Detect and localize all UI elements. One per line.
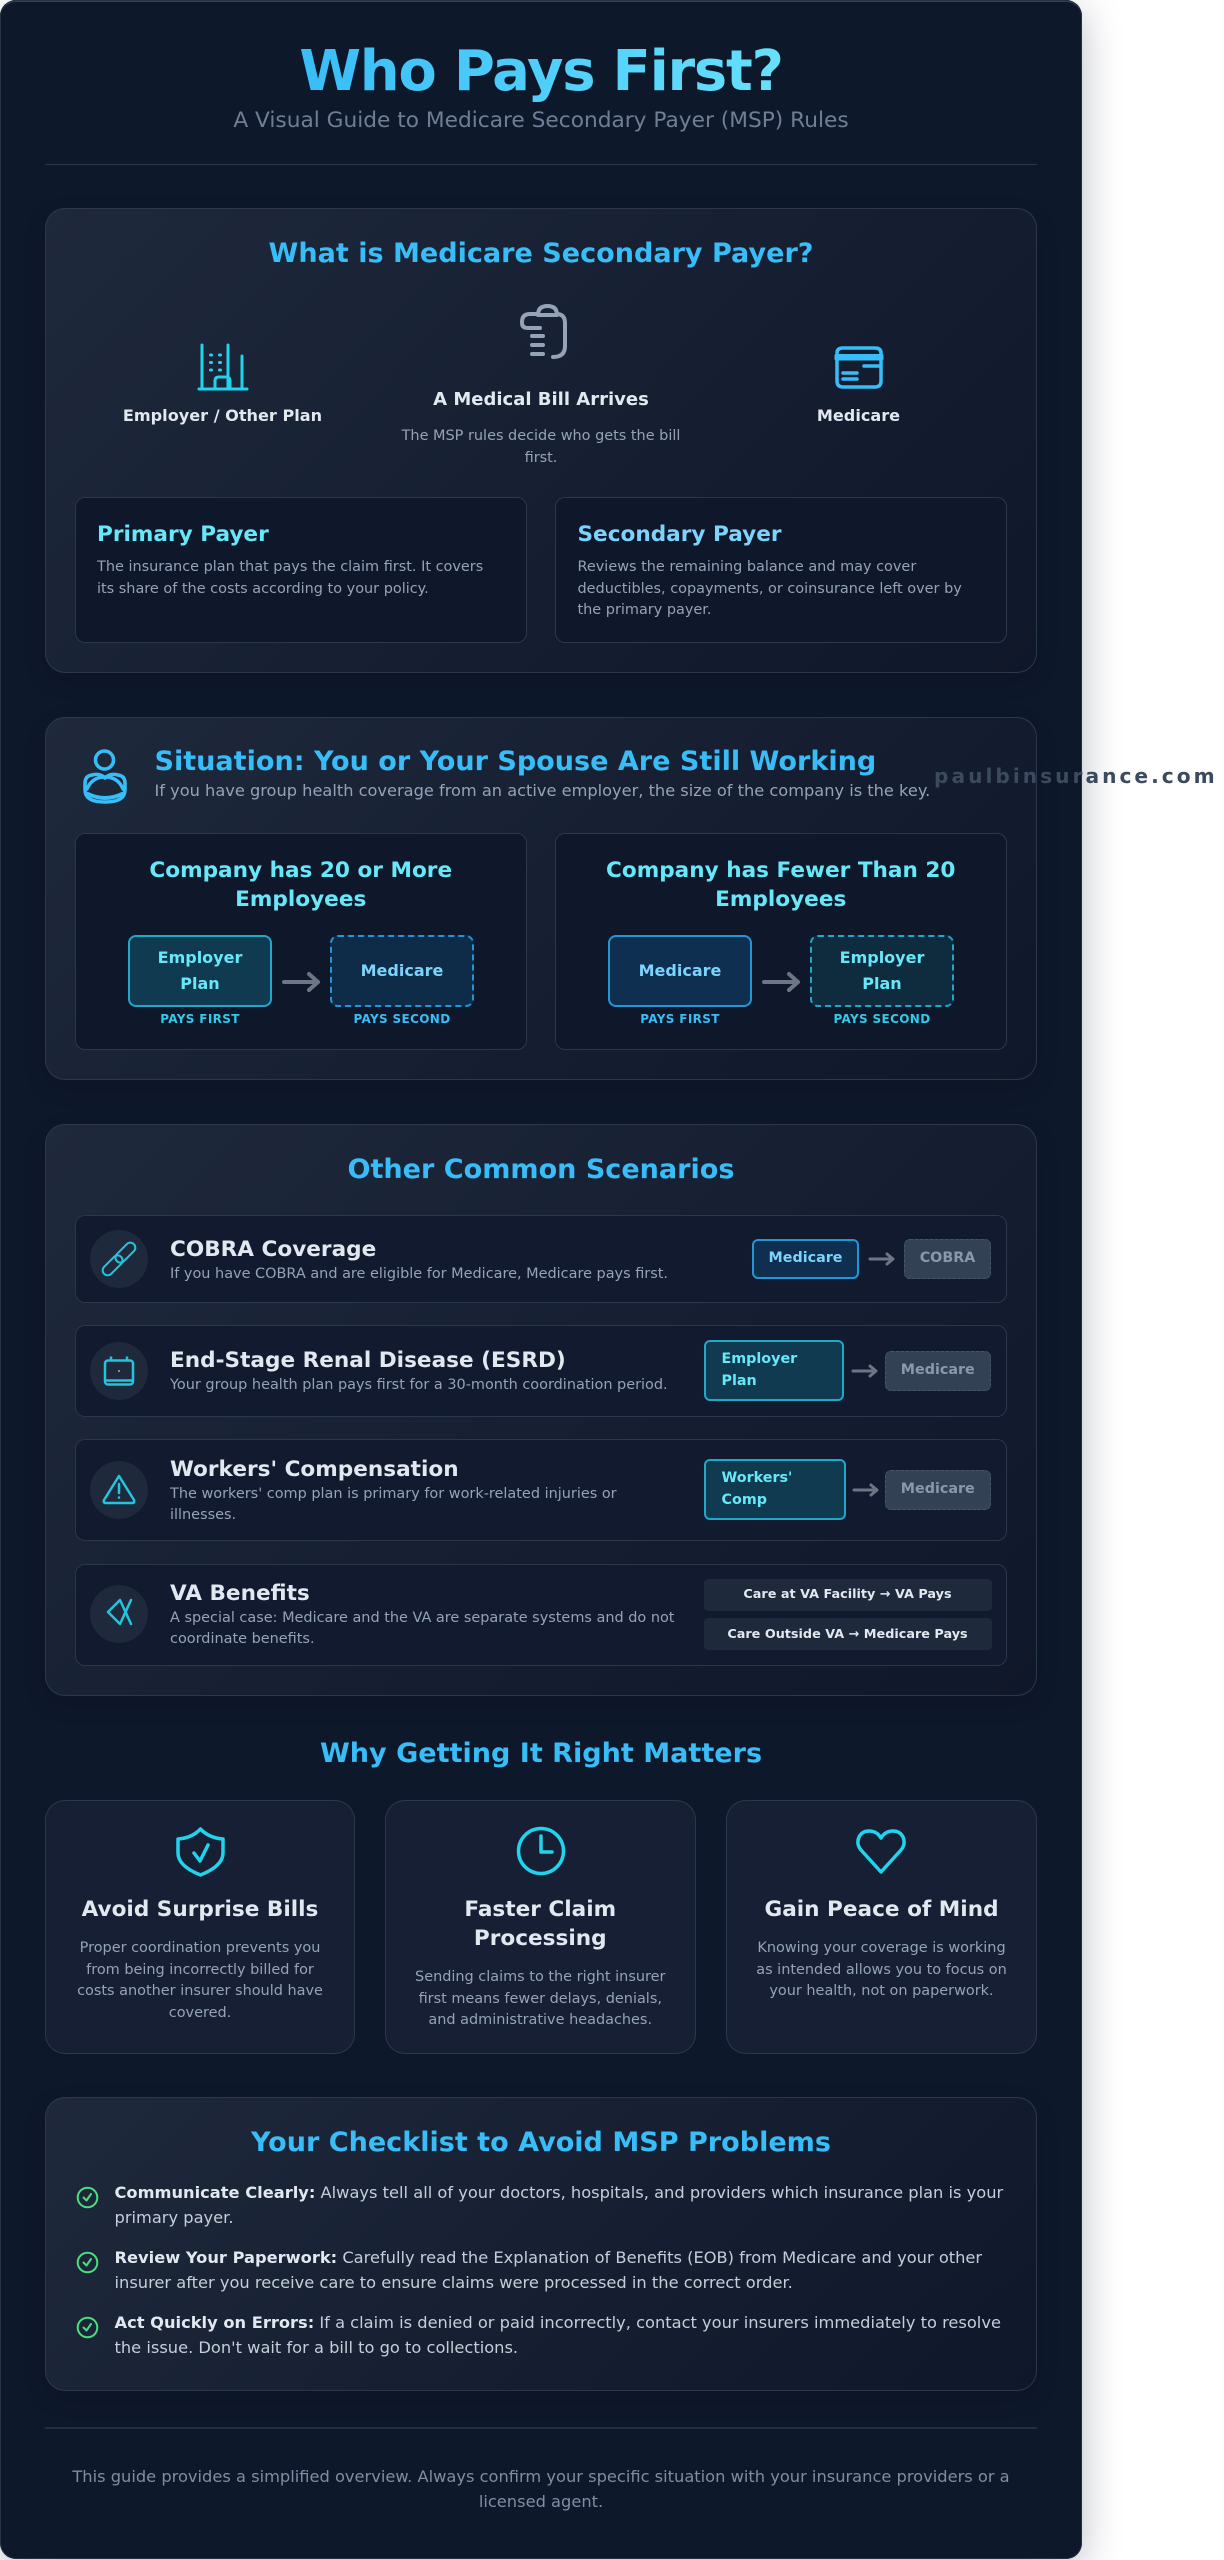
icon: person bbox=[83, 749, 127, 804]
title: Workers' Compensation bbox=[170, 1456, 459, 1482]
label: pays second: PAYS SECOND bbox=[833, 1012, 931, 1026]
arrow bbox=[852, 1364, 878, 1378]
icon: va symbol bbox=[90, 1585, 148, 1643]
footer note bbox=[72, 2466, 1010, 2510]
label: pays first: PAYS FIRST bbox=[640, 1012, 720, 1026]
description bbox=[170, 1486, 617, 1523]
text: Act Quickly on Errors: If a claim is denied or paid incorrectly, contact your insurers immediately to resolve bbox=[114, 2313, 1001, 2332]
card: secondary payer bbox=[555, 497, 1006, 643]
box: employer plan primary: Plan bbox=[180, 974, 220, 993]
badge: medicare bbox=[752, 1239, 859, 1279]
description: Knowing your coverage is working bbox=[757, 1940, 1006, 1956]
panel: what is medicare secondary payer bbox=[45, 208, 1037, 673]
row: va benefits bbox=[75, 1564, 1007, 1666]
card: fewer than 20 employees bbox=[555, 833, 1006, 1050]
heading: Your Checklist to Avoid MSP Problems bbox=[251, 2127, 831, 2158]
title: End-Stage Renal Disease (ESRD) bbox=[170, 1348, 566, 1373]
badge: medicare bbox=[884, 1470, 991, 1510]
title: Faster Claim bbox=[464, 1896, 616, 1922]
box: employer plan secondary bbox=[810, 935, 954, 1007]
description bbox=[77, 1940, 323, 2021]
secondary payer text: the primary payer. bbox=[578, 602, 712, 618]
description: costs another insurer should have bbox=[77, 1983, 323, 1999]
heading: What is Medicare Secondary Payer? bbox=[269, 238, 813, 269]
heading: Why Getting It Right Matters bbox=[320, 1738, 762, 1769]
badge: medicare: Medicare bbox=[901, 1481, 975, 1497]
label: medicare: Medicare bbox=[817, 406, 900, 425]
badge: care at va: Care at VA Facility → VA Pays bbox=[743, 1587, 952, 1602]
badge: care outside va: Care Outside VA → Medicare Pays bbox=[727, 1626, 968, 1642]
box: employer plan secondary: Plan bbox=[862, 974, 902, 993]
badge: employer plan bbox=[704, 1340, 844, 1401]
secondary payer heading: Secondary Payer bbox=[578, 522, 782, 547]
row: esrd bbox=[75, 1325, 1007, 1417]
text: Review Your Paperwork: Carefully read the Explanation of Benefits (EOB) from Medicare and your other bbox=[114, 2248, 982, 2267]
check item: act quickly bbox=[76, 2313, 1001, 2357]
icon: employer building bbox=[198, 344, 248, 390]
arrow bbox=[868, 1252, 894, 1266]
card heading: Employees bbox=[235, 887, 366, 912]
badge: care at va bbox=[704, 1578, 992, 1610]
secondary payer text bbox=[578, 559, 962, 618]
description bbox=[756, 1940, 1007, 1999]
footer note: licensed agent. bbox=[479, 2492, 603, 2510]
subheading: If you have group health coverage from an active employer, the size of the company is the key. bbox=[154, 781, 930, 800]
description: If you have COBRA and are eligible for Medicare, Medicare pays first. bbox=[170, 1266, 668, 1282]
description: and administrative headaches. bbox=[428, 2012, 652, 2028]
footer note: This guide provides a simplified overview. Always confirm your specific situation with your insurance providers or a bbox=[72, 2466, 1010, 2486]
section: why it matters bbox=[45, 1738, 1037, 2054]
badge: employer plan: Plan bbox=[722, 1372, 757, 1388]
description: as intended allows you to focus on bbox=[756, 1962, 1007, 1978]
heading: Other Common Scenarios bbox=[348, 1154, 734, 1184]
badge: cobra bbox=[904, 1239, 991, 1279]
title: Gain Peace of Mind bbox=[764, 1896, 999, 1922]
text: insurer after you receive care to ensure claims were processed in the correct order. bbox=[114, 2273, 793, 2292]
text: medical bill description: The MSP rules decide who gets the bill bbox=[402, 428, 680, 444]
title bbox=[464, 1896, 616, 1950]
icon: check bbox=[76, 2186, 98, 2208]
panel: still working situation bbox=[45, 717, 1037, 1080]
icon: check bbox=[76, 2252, 98, 2274]
subtitle: A Visual Guide to Medicare Secondary Payer (MSP) Rules bbox=[233, 108, 849, 133]
text bbox=[114, 2313, 1001, 2357]
title: VA Benefits bbox=[170, 1581, 310, 1606]
text: Communicate Clearly: Always tell all of your doctors, hospitals, and providers which insurance plan is your bbox=[114, 2183, 1003, 2202]
label: employer: Employer / Other Plan bbox=[123, 406, 322, 425]
description: your health, not on paperwork. bbox=[769, 1983, 994, 1999]
badge: care outside va bbox=[704, 1618, 992, 1650]
header divider bbox=[45, 164, 1037, 165]
row: cobra bbox=[75, 1215, 1007, 1303]
title: Processing bbox=[474, 1926, 607, 1950]
arrow bbox=[852, 1483, 878, 1497]
badge: medicare: Medicare bbox=[769, 1250, 842, 1266]
description: from being incorrectly billed for bbox=[86, 1962, 314, 1978]
box: medicare primary: Medicare bbox=[639, 961, 721, 980]
badge: employer plan: Employer bbox=[722, 1351, 797, 1367]
arrow bbox=[762, 972, 800, 992]
card heading bbox=[606, 858, 955, 912]
label: pays second: PAYS SECOND bbox=[353, 1012, 451, 1026]
description: Proper coordination prevents you bbox=[80, 1940, 320, 1956]
title: COBRA Coverage bbox=[170, 1236, 376, 1262]
icon: medical bill clipboard bbox=[520, 304, 567, 359]
icon: shield bbox=[176, 1827, 225, 1877]
card heading: Company has 20 or More bbox=[149, 858, 452, 883]
card heading: Employees bbox=[715, 887, 846, 912]
title: Who Pays First? bbox=[299, 39, 783, 104]
primary payer text: its share of the costs according to your policy. bbox=[97, 581, 429, 597]
row: workers comp bbox=[75, 1439, 1007, 1541]
description: Your group health plan pays first for a 30-month coordination period. bbox=[170, 1377, 668, 1393]
card heading bbox=[149, 858, 452, 912]
heading: Situation: You or Your Spouse Are Still Working bbox=[154, 746, 876, 777]
badge: cobra: COBRA bbox=[920, 1250, 975, 1266]
primary payer heading: Primary Payer bbox=[97, 522, 269, 547]
text: medical bill description bbox=[402, 428, 680, 466]
box: medicare secondary bbox=[330, 935, 474, 1007]
primary payer text: The insurance plan that pays the claim first. It covers bbox=[97, 559, 483, 575]
description: illnesses. bbox=[170, 1507, 236, 1523]
icon: calendar bbox=[90, 1342, 148, 1400]
label: medical bill: A Medical Bill Arrives bbox=[433, 389, 649, 410]
primary payer text bbox=[96, 559, 483, 597]
description: A special case: Medicare and the VA are separate systems and do not bbox=[170, 1610, 674, 1626]
box: medicare primary bbox=[608, 935, 752, 1007]
badge: workers comp bbox=[704, 1459, 846, 1520]
icon: check bbox=[76, 2316, 98, 2338]
check item: review bbox=[76, 2248, 982, 2292]
arrow bbox=[282, 972, 320, 992]
description bbox=[170, 1610, 674, 1647]
icon: clock bbox=[516, 1826, 566, 1876]
text: primary payer. bbox=[114, 2208, 234, 2227]
badge: workers comp: Workers' bbox=[722, 1470, 792, 1486]
card: avoid surprise bills bbox=[45, 1800, 355, 2054]
badge: medicare bbox=[884, 1351, 991, 1391]
watermark: paulbinsurance.com bbox=[934, 764, 1218, 788]
box: employer plan primary: Employer bbox=[158, 948, 242, 967]
secondary payer text: Reviews the remaining balance and may cover bbox=[578, 559, 916, 575]
text bbox=[114, 2183, 1004, 2227]
label: pays first: PAYS FIRST bbox=[160, 1012, 240, 1026]
panel: checklist bbox=[45, 2097, 1037, 2391]
icon: chain link bbox=[90, 1230, 148, 1288]
text: medical bill description: first. bbox=[525, 450, 557, 466]
card heading: Company has Fewer Than 20 bbox=[606, 858, 955, 883]
secondary payer text: deductibles, copayments, or coinsurance left over by bbox=[578, 581, 962, 597]
box: medicare secondary: Medicare bbox=[361, 961, 443, 980]
description bbox=[415, 1969, 666, 2028]
box: employer plan secondary: Employer bbox=[840, 948, 924, 967]
card: primary payer bbox=[75, 497, 526, 643]
description: coordinate benefits. bbox=[170, 1631, 315, 1647]
card: 20 or more employees bbox=[75, 833, 526, 1050]
title: Avoid Surprise Bills bbox=[82, 1896, 318, 1922]
card: peace of mind bbox=[726, 1800, 1037, 2054]
text: the issue. Don't wait for a bill to go to collections. bbox=[114, 2338, 518, 2357]
footer divider bbox=[45, 2427, 1037, 2429]
description: first means fewer delays, denials, bbox=[419, 1991, 662, 2007]
icon: heart bbox=[856, 1829, 906, 1874]
badge: workers comp: Comp bbox=[722, 1492, 767, 1508]
icon: warning triangle bbox=[90, 1461, 148, 1519]
badge: medicare: Medicare bbox=[901, 1362, 975, 1378]
panel: other common scenarios bbox=[45, 1124, 1037, 1696]
description: covered. bbox=[169, 2005, 231, 2021]
card: faster claim processing bbox=[384, 1800, 696, 2054]
description: Sending claims to the right insurer bbox=[415, 1969, 665, 1985]
icon: medicare card bbox=[834, 346, 884, 389]
text bbox=[114, 2248, 982, 2292]
description: The workers' comp plan is primary for work-related injuries or bbox=[170, 1486, 617, 1502]
check item: communicate bbox=[76, 2183, 1004, 2227]
box: employer plan primary bbox=[128, 935, 272, 1007]
